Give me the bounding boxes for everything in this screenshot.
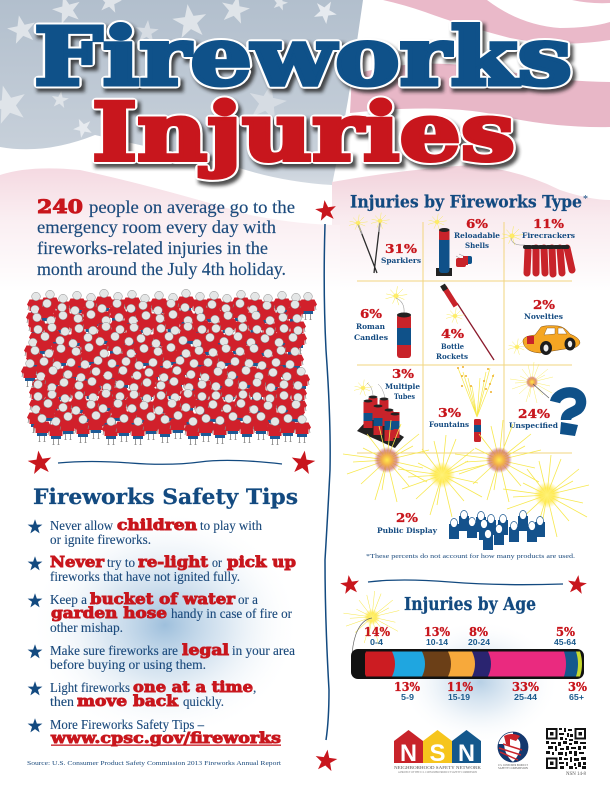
tip 3: handy in case of fire or [171,606,293,621]
tip 5: , [253,680,256,695]
tip 1: Never allow [50,518,113,533]
logo: Neighborhood Safety Network: N [400,740,417,767]
tip 2: re-light [138,554,208,571]
tip 2: pick up [227,554,296,571]
left divider with stars [27,449,316,475]
tip 6: More Fireworks Safety Tips – [50,717,204,732]
tip 4: in your area [232,643,295,658]
tip 4: legal [182,642,230,659]
right divider with stars [339,574,588,594]
type: sparklers 31%: 31% [385,241,417,256]
type: sparklers 31%: Sparklers [381,256,421,265]
logo: Neighborhood Safety Network: A PROJECT OF THE U.S. CONSUMER PRODUCT SAFETY COMMISSION [398,771,477,774]
logo: CPSC seal: SAFETY COMMISSION [498,767,528,770]
title line: Injuries: Injuries [92,85,515,179]
type: novelties 2% with car: Novelties [524,312,563,321]
logo: Neighborhood Safety Network: NEIGHBORHOOD SAFETY NETWORK [394,765,482,770]
tip 5: quickly. [183,694,224,709]
tip 3: garden hose [51,605,167,622]
type: sparklers 31% [349,213,421,273]
title line: Fireworks: Fireworks [34,10,572,104]
type: firecrackers 11%: 11% [533,216,564,231]
age labels top: 10-14 [426,637,448,647]
type: unspecified 24%: Unspecified [509,421,558,430]
people crowd: 240 figures [21,289,317,444]
tip 4: before buying or using them. [50,657,206,672]
age labels bottom: 3% [568,679,587,694]
logo: CPSC seal: U.S. CONSUMER PRODUCT [498,764,528,767]
title line: Fireworks: Fireworks [37,13,575,107]
type: multiple tubes 3%: Multiple [385,382,420,391]
type: novelties 2% with car: 2% [533,297,555,312]
tip 2: or [212,555,222,570]
type: roman candles 6% [354,286,411,358]
type: multiple tubes 3% [354,366,420,448]
type: reloadable shells 6%: Shells [465,241,489,250]
tip 2 [28,554,296,584]
fireworks type grid lines [357,222,572,453]
age labels bottom: 5-9 [401,692,414,702]
tip 2: Never [50,554,104,571]
tip 1: or ignite fireworks. [50,532,151,547]
explosions [343,420,589,537]
footnote: *These percents do not account for how many products are used. [366,553,575,560]
intro statement [37,196,295,279]
title: Fireworks Injuries [34,10,575,183]
type: reloadable shells 6%: 6% [466,216,488,231]
type: fountains 3%: 3% [438,405,461,420]
tip 5: Light fireworks [50,680,130,695]
type: firecrackers 11% [502,216,575,274]
tip 6: www.cpsc.gov/fireworks [50,730,281,747]
type: firecrackers 11%: Firecrackers [522,231,575,240]
logo: Neighborhood Safety Network: S [430,740,446,767]
age labels bottom [394,679,587,702]
tip 5: move back [77,693,179,710]
type: bottle rockets 4%: 4% [441,326,464,341]
type: fountains 3% [429,366,494,442]
vertical divider with stars [314,199,338,772]
age labels bottom: 15-19 [448,692,470,702]
type: bottle rockets 4%: Bottle [441,342,464,351]
age labels bottom: 65+ [569,692,584,702]
age labels bottom: 11% [447,679,473,694]
type: reloadable shells 6%: Reloadable [454,231,500,240]
chart: injuries by age firecracker bar [343,591,587,702]
intro statement: emergency room every day with [37,217,276,237]
tip 3: Keep a [50,592,87,607]
type: public display 2%: 2% [396,510,418,525]
age labels bottom: 33% [512,679,539,694]
tip 6 [28,717,281,747]
title line: Fireworks: Fireworks [34,10,572,104]
age labels bottom: 25-44 [514,692,537,702]
logo: Neighborhood Safety Network: N [458,740,475,767]
tip 1: children [117,517,198,534]
title line: Injuries: Injuries [92,85,515,179]
type: unspecified 24% [509,362,581,436]
tip 1 [28,517,262,547]
source note: Source: U.S. Consumer Product Safety Commission 2013 Fireworks Annual Report [27,760,281,767]
type: fountains 3%: Fountains [429,420,469,429]
tip 2: fireworks that have not ignited fully. [50,569,240,584]
tip 4 [28,642,295,672]
type: bottle rockets 4% [436,285,494,361]
tip 3: or a [238,592,258,607]
type: public display 2%: Public Display [377,526,438,535]
QR code: NSN 14-8 [566,772,587,777]
type: roman candles 6%: Roman [356,322,386,331]
age labels top: 13% [424,624,450,639]
age labels top: 45-64 [554,637,576,647]
tip 5 [28,679,256,710]
type: public display 2% [343,420,589,550]
tip 1: to play with [200,518,262,533]
age labels top: 14% [364,624,390,639]
type: multiple tubes 3%: Tubes [394,392,415,401]
heading: Injuries by Fireworks Type: Injuries by Fireworks Type [350,192,582,212]
type: roman candles 6%: 6% [360,306,382,321]
tip 5: then [50,694,74,709]
QR code [546,728,587,777]
age labels top: 20-24 [468,637,490,647]
age labels top: 5% [556,624,575,639]
logo: Neighborhood Safety Network [394,730,482,774]
sparkle and fuse [343,591,399,660]
intro statement: fireworks-related injuries in the [37,238,268,258]
safety tips list [28,517,296,747]
logo: CPSC seal [498,732,528,770]
heading: Injuries by Fireworks Type: * [583,194,588,205]
bar segments [351,649,584,679]
tip 4: Make sure fireworks are [50,643,178,658]
tip 2: try to [107,555,135,570]
tip 3: other mishap. [50,620,123,635]
type: unspecified 24%: 24% [518,406,550,421]
intro statement: month around the July 4th holiday. [37,259,286,279]
age labels bottom: 13% [394,679,420,694]
tip 3: bucket of water [90,591,235,608]
age labels top [364,624,576,647]
tip 3 [28,591,293,635]
title line: Injuries: Injuries [95,89,518,183]
type: bottle rockets 4%: Rockets [436,352,468,361]
tip 5: one at a time [133,679,253,696]
intro statement: people on average go to the [89,197,295,217]
age labels top: 0-4 [370,637,383,647]
age labels top: 8% [469,624,488,639]
heading: Fireworks Safety Tips: Fireworks Safety Tips [33,485,298,510]
type: multiple tubes 3%: 3% [392,366,414,381]
intro statement: 240 [37,196,83,218]
spectators [449,510,545,550]
type: roman candles 6%: Candles [354,333,388,342]
heading: Injuries by Age: Injuries by Age [404,595,536,615]
type: novelties 2% with car [508,297,580,355]
type: reloadable shells 6% [428,214,500,276]
